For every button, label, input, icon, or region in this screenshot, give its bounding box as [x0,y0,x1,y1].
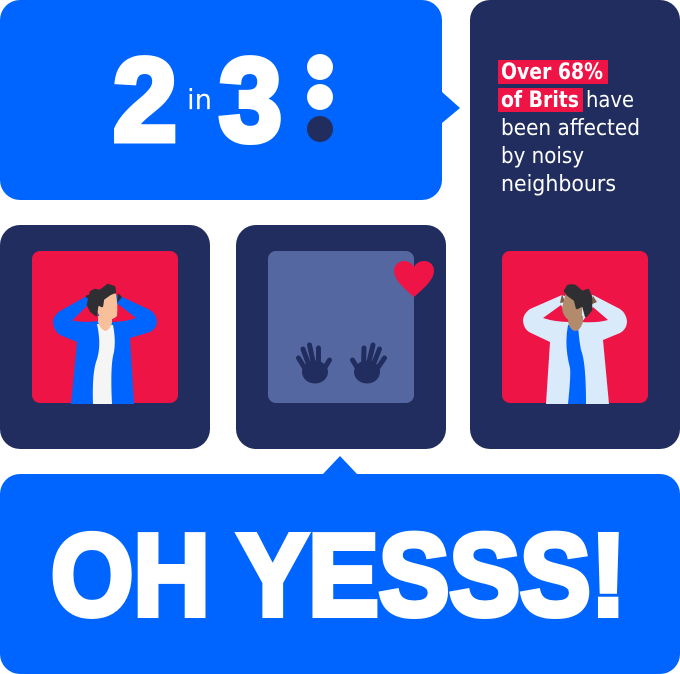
panel: left neighbour card [0,225,210,449]
statistic: 2 in 3: 2 [113,34,177,166]
text block: over 68% of Brits: Over 68% [501,60,603,85]
heading: OH YESSS!: OH YESSS! [51,510,626,640]
text block: over 68% of Brits: by noisy [501,144,584,169]
icon: heart [394,261,434,297]
panel: 2 in 3 speech bubble [0,0,460,200]
panel: tall statistic card [470,0,680,449]
text block: over 68% of Brits: been affected [501,116,640,141]
statistic: 2 in 3 [113,34,282,166]
illustration: window [268,251,414,403]
statistic: 2 in 3: 3 [219,34,282,166]
illustration: neighbour with blue jacket [32,251,178,404]
icon: three dots [307,54,333,142]
icon: left hand print [298,345,330,384]
text block: over 68% of Brits [498,60,640,197]
text block: over 68% of Brits: have [586,88,634,113]
text block: over 68% of Brits: neighbours [501,172,616,197]
icon: right hand print [352,345,384,384]
illustration: neighbour with pale jacket [502,251,648,404]
text block: over 68% of Brits: of Brits [501,88,579,113]
statistic: 2 in 3: in [187,83,212,116]
panel: middle window card [236,225,446,449]
